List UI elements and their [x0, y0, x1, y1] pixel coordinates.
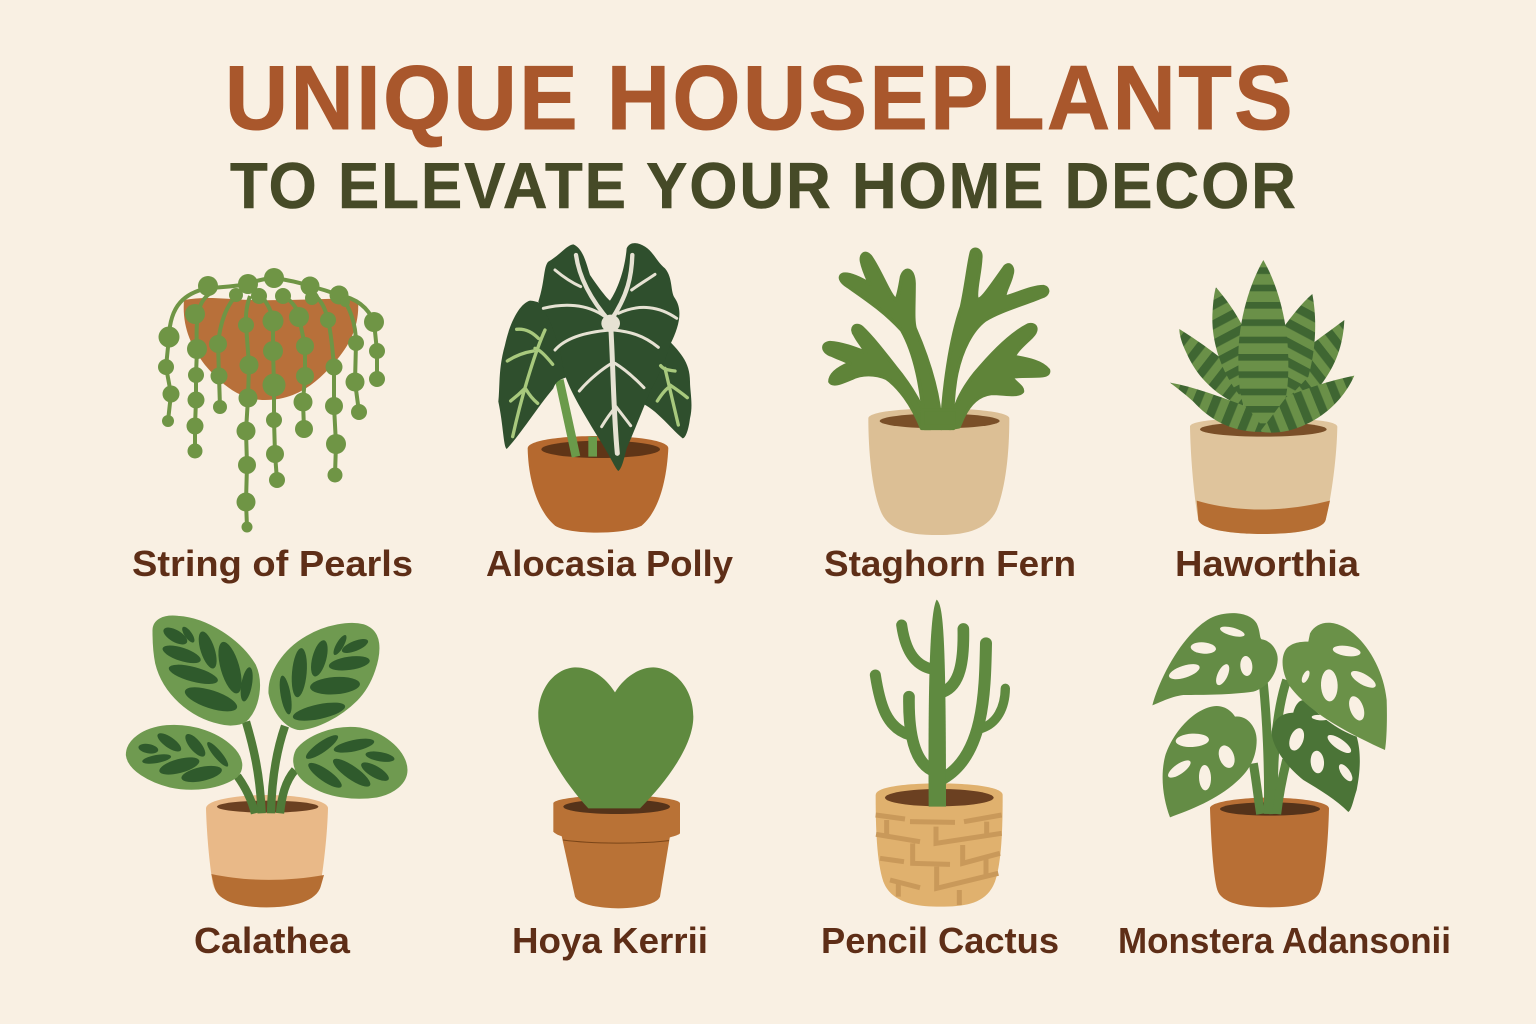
- white veins: [543, 255, 677, 453]
- plant: Staghorn Fern: [824, 249, 1049, 535]
- leaves: [127, 616, 407, 798]
- label: Staghorn Fern: Staghorn Fern: [824, 543, 1076, 584]
- pot band: [1197, 501, 1330, 534]
- plant: Pencil Cactus: [875, 600, 1005, 907]
- lower left leaf holes: [1166, 733, 1238, 791]
- label: Pencil Cactus: Pencil Cactus: [821, 920, 1059, 961]
- plant: String of Pearls: [158, 268, 385, 532]
- stems: [237, 722, 295, 813]
- stems: [1253, 680, 1287, 814]
- hanging pot: [184, 298, 358, 400]
- cactus stems: [875, 625, 1005, 778]
- soil: [885, 789, 994, 806]
- leaf markings: [138, 624, 395, 792]
- dark leaf holes: [1286, 714, 1355, 783]
- pot: [528, 436, 668, 533]
- label: Haworthia: Haworthia: [1175, 543, 1360, 584]
- basket pot: [876, 783, 1003, 907]
- lower left leaf: [1163, 706, 1257, 817]
- top right leaf: [1283, 623, 1387, 750]
- top right leaf holes: [1300, 644, 1378, 723]
- pot: [1190, 418, 1337, 534]
- rim shadow: [563, 840, 669, 843]
- basket weave: [876, 815, 1002, 905]
- main leaf: [538, 243, 679, 471]
- soil: [880, 414, 1000, 428]
- soil: [541, 441, 660, 458]
- label: String of Pearls: String of Pearls: [132, 543, 413, 584]
- label: Hoya Kerrii: Hoya Kerrii: [512, 920, 708, 961]
- striped leaves: [1170, 260, 1354, 433]
- top left leaf: [1152, 613, 1278, 705]
- light veins: [507, 329, 687, 437]
- stems: [559, 380, 593, 457]
- pot rim: [553, 795, 680, 843]
- pot: [206, 795, 328, 907]
- plant: Hoya Kerrii: [538, 667, 693, 908]
- label: Monstera Adansonii: Monstera Adansonii: [1118, 920, 1451, 961]
- left leaf: [498, 301, 580, 449]
- top left leaf holes: [1167, 625, 1253, 687]
- pot: [1210, 798, 1329, 907]
- dark leaf: [1272, 700, 1360, 812]
- pot body: [560, 830, 671, 908]
- subtitle: TO ELEVATE YOUR HOME DECOR: [230, 151, 1296, 222]
- heart leaf: [538, 667, 693, 808]
- plant: Monstera Adansonii: [1152, 613, 1387, 907]
- fronds: [824, 249, 1049, 428]
- pearls: [158, 268, 385, 532]
- plant: Alocasia Polly: [498, 243, 691, 533]
- pot: [868, 408, 1009, 535]
- plant: Calathea: [127, 616, 407, 907]
- pearl strands: [166, 278, 377, 527]
- pot band: [211, 874, 324, 907]
- right leaf: [637, 335, 691, 438]
- label: Alocasia Polly: Alocasia Polly: [486, 543, 733, 584]
- soil: [563, 799, 670, 814]
- label: Calathea: Calathea: [194, 920, 351, 961]
- title: UNIQUE HOUSEPLANTS: [225, 46, 1293, 148]
- soil: [217, 801, 318, 813]
- soil: [1200, 422, 1327, 437]
- main stem: [929, 600, 946, 807]
- soil: [1220, 802, 1320, 816]
- plant: Haworthia: [1170, 260, 1354, 534]
